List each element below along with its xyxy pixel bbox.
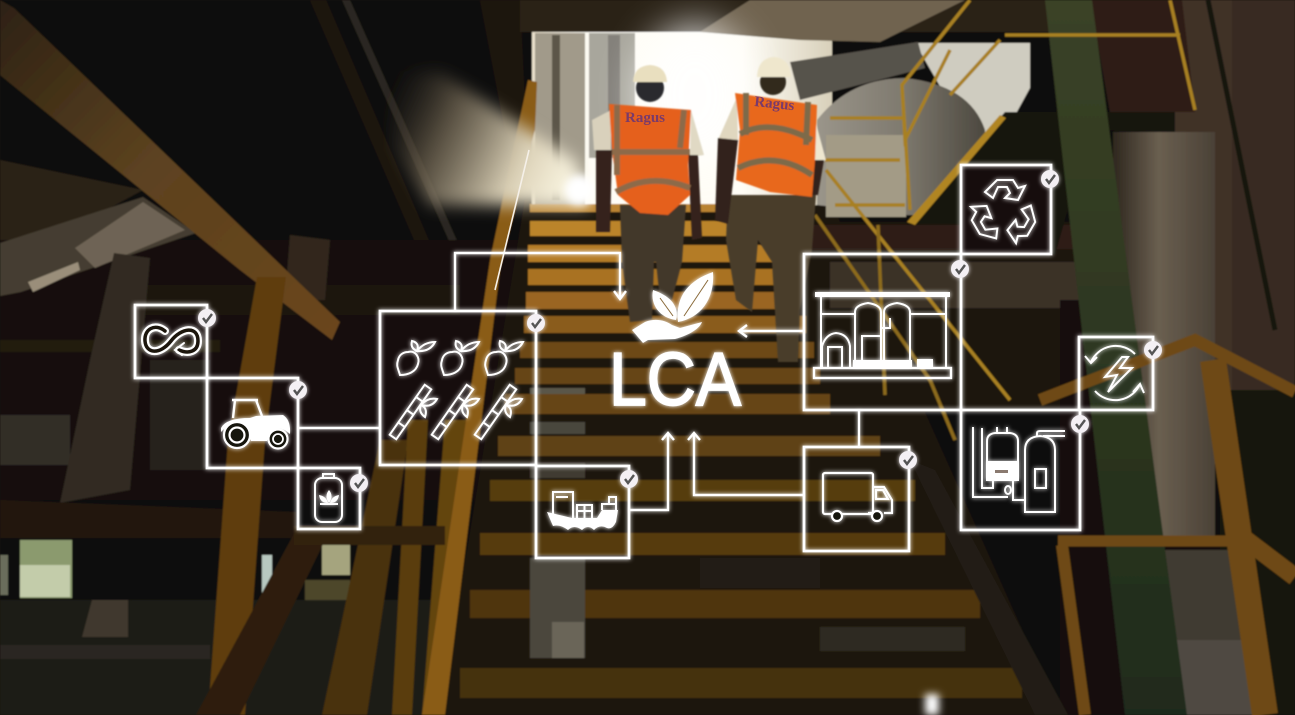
connector lines — [298, 253, 859, 510]
silver duct — [0, 197, 196, 296]
bottom glare — [925, 694, 939, 715]
brown pipe rail — [0, 0, 340, 340]
green column — [1045, 0, 1187, 715]
heading: LCA — [609, 337, 741, 421]
center logo: LCA — [609, 272, 741, 421]
stair side stringer right — [910, 460, 1068, 715]
legs — [726, 195, 816, 362]
icon: factory with tanks — [814, 292, 951, 378]
panel: recycling — [961, 165, 1059, 254]
icon: sugar canes — [390, 385, 522, 439]
check badge — [620, 470, 638, 488]
check badge — [198, 309, 216, 327]
check badge — [1071, 415, 1089, 433]
panel: transport — [804, 447, 917, 551]
right wall — [1175, 0, 1295, 400]
arms — [718, 97, 738, 142]
vest lettering right: Ragus — [754, 94, 795, 114]
panel: production plant — [804, 254, 969, 410]
worker right — [715, 57, 826, 362]
icon: tractor — [221, 400, 290, 448]
vest — [609, 104, 691, 215]
check badge — [951, 260, 969, 278]
icon: recycle arrows — [966, 180, 1041, 246]
check badge — [1041, 170, 1059, 188]
left stair rail — [422, 80, 537, 715]
ceiling — [0, 0, 530, 300]
light beam — [385, 70, 590, 205]
vest — [735, 93, 817, 197]
icon: energy cycle — [1085, 346, 1144, 400]
panel: agriculture — [207, 378, 307, 468]
large grey column — [1113, 132, 1215, 540]
panel: biofuel battery — [298, 468, 368, 529]
panel: waste treatment — [961, 410, 1089, 530]
orange right railings — [1040, 340, 1295, 715]
dark ceiling header — [520, 0, 1050, 32]
icon: truck — [823, 473, 892, 521]
grey stump — [82, 600, 128, 637]
window light — [532, 30, 832, 205]
check badge — [350, 474, 368, 492]
lower back wall behind stair — [810, 222, 1110, 412]
under-stair dark — [440, 200, 1060, 715]
head — [636, 74, 664, 102]
floor — [0, 600, 470, 715]
window bloom — [640, 25, 750, 165]
chain right — [1208, 0, 1275, 330]
worker left — [592, 65, 704, 322]
orange columns left — [208, 277, 286, 715]
head — [760, 69, 786, 95]
mid-left plant background — [0, 240, 530, 500]
thin light streak on rail — [495, 150, 529, 290]
bright windows bottom left — [0, 540, 350, 600]
hard hat — [633, 65, 667, 82]
LCA diagram overlay — [135, 165, 1162, 558]
panel: circular economy — [135, 305, 216, 378]
check badge — [899, 451, 917, 469]
icon: infinity loop — [145, 327, 198, 355]
hard hat — [757, 57, 791, 77]
lens glow — [565, 175, 595, 205]
check badge — [289, 381, 307, 399]
panel: shipping — [536, 465, 638, 558]
icon: leaves in hand — [632, 272, 713, 343]
icon: boiler and cylinder — [973, 427, 1065, 512]
icon: battery with leaf — [315, 474, 342, 522]
icon: cargo ship — [547, 492, 618, 530]
vest lettering: Ragus — [625, 110, 665, 126]
dark bulb post — [82, 540, 265, 600]
legs — [620, 205, 686, 322]
grey post left — [60, 253, 150, 503]
panel: renewable energy — [961, 337, 1162, 410]
check badge — [527, 314, 545, 332]
dark wood beam over duct — [0, 160, 143, 243]
brown horizontal pipe — [0, 500, 296, 538]
upper yellow railings — [815, 0, 1195, 440]
stair treads — [460, 204, 1022, 698]
platform — [907, 112, 1195, 255]
panel: raw materials — [380, 311, 545, 465]
arms — [592, 110, 611, 150]
icon: fruits — [397, 341, 523, 375]
check badge — [1144, 341, 1162, 359]
silver tank and pipe at back right — [790, 42, 1030, 217]
